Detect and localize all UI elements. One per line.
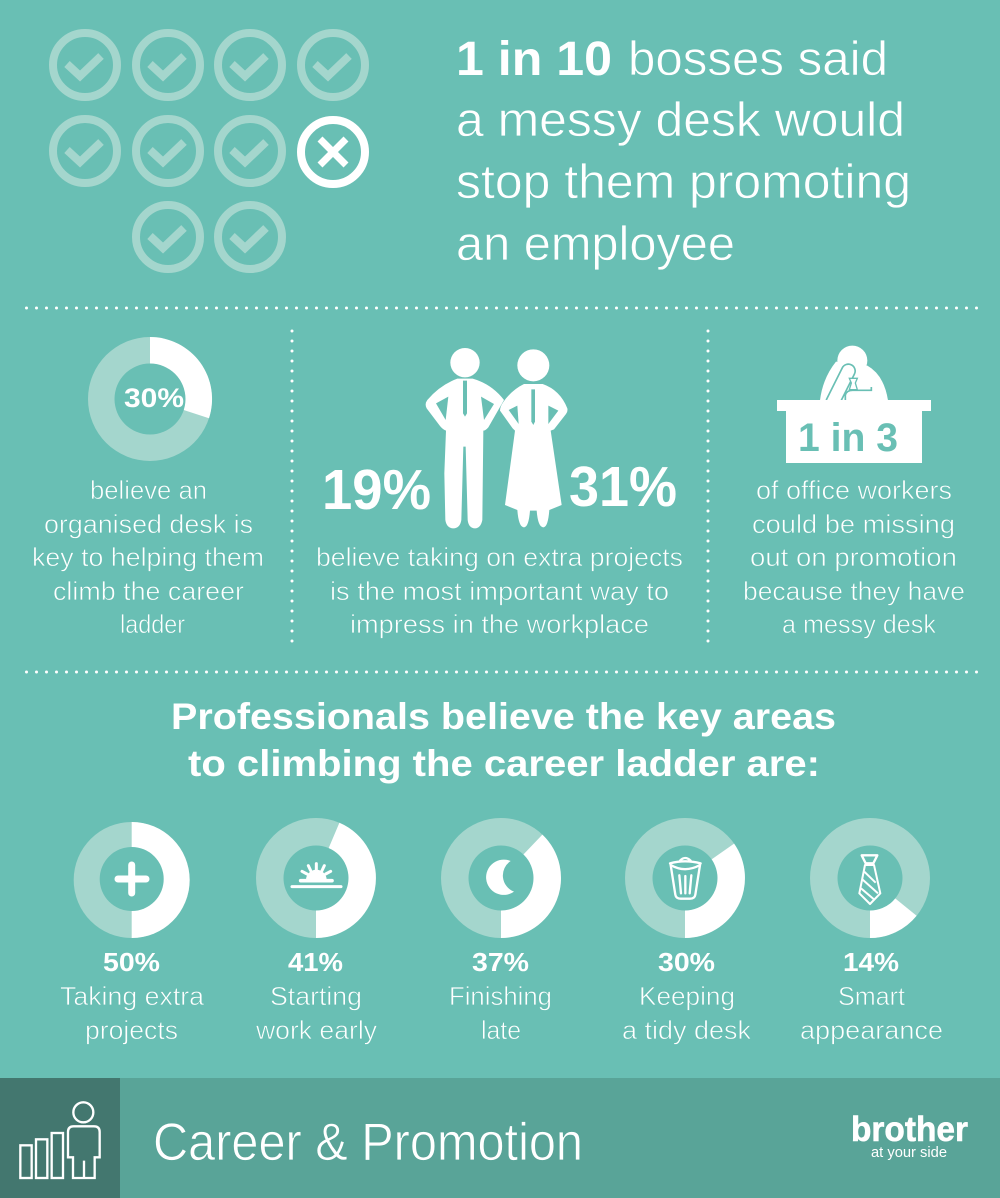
heading: key areas: Professionals believe the key areas — [171, 696, 836, 737]
text: organised desk: believe an — [90, 475, 207, 505]
label: 37% — [449, 949, 552, 1045]
headline: stop them promoting — [456, 156, 911, 209]
stat: 19%: 19% — [322, 458, 431, 522]
text: messy desk — [743, 475, 965, 639]
text: messy desk: because they have — [743, 576, 965, 606]
label: 41%: work early — [255, 1015, 377, 1045]
donut chart: 30%: 30% — [124, 383, 184, 413]
icon: sunrise — [292, 864, 341, 887]
headline: an employee — [456, 218, 735, 271]
panel: 41% starting work early — [255, 818, 377, 1045]
text: extra projects: is the most important way to — [330, 576, 669, 606]
icon: plus — [118, 865, 146, 893]
icon: desk — [777, 400, 931, 463]
footer title: Career & Promotion — [153, 1113, 583, 1172]
panel: 14% smart appearance — [800, 818, 943, 1045]
man figure — [426, 348, 504, 528]
panel: 1 in 10 bosses — [53, 33, 911, 271]
text: messy desk: of office workers — [756, 475, 952, 505]
text: extra projects: believe taking on extra projects — [316, 542, 683, 572]
label: 41%: 41% — [288, 949, 343, 977]
icon grid: nine ticks and one cross — [53, 33, 365, 269]
label: 50%: Taking extra — [60, 981, 205, 1011]
label: 41% — [255, 949, 377, 1045]
label: 14%: 14% — [843, 949, 899, 977]
icon tile: career growth — [0, 1078, 120, 1198]
label: 30%: 30% — [658, 949, 715, 977]
stat: 31%: 31% — [569, 455, 677, 519]
text: messy desk: out on promotion — [750, 542, 957, 572]
panel: 37% finishing late — [441, 818, 561, 1045]
donut chart: 50% — [74, 822, 190, 938]
label: 41%: Starting — [270, 981, 362, 1011]
text: extra projects — [316, 542, 683, 639]
icon: striped tie — [859, 855, 880, 904]
text: messy desk: a messy desk — [782, 609, 937, 639]
label: 50%: projects — [85, 1015, 178, 1045]
icon: waste bin — [670, 858, 701, 899]
label: 14%: Smart — [838, 981, 906, 1011]
donut chart: 30% — [625, 818, 745, 938]
headline — [456, 33, 911, 271]
label: 14% — [800, 949, 943, 1045]
label: 50% — [60, 949, 205, 1045]
logo: brother at your side: at your side — [871, 1144, 947, 1161]
label: 37%: 37% — [472, 949, 529, 977]
woman figure — [500, 349, 567, 527]
heading: key areas: to climbing the career ladder are: — [188, 743, 820, 784]
panel: 50% taking extra projects — [60, 822, 205, 1045]
label: 37%: Finishing — [449, 981, 552, 1011]
panel: organised desk 30% — [32, 337, 264, 639]
text: organised desk: ladder — [120, 609, 185, 639]
label: 30%: a tidy desk — [622, 1015, 752, 1045]
icon: person slumped over desk — [820, 346, 888, 408]
text: organised desk: organised desk is — [44, 509, 253, 539]
label: 37%: late — [481, 1015, 521, 1045]
donut chart: 14% — [810, 818, 930, 938]
headline: bosses said — [628, 33, 888, 86]
panel: extra projects 19% and 31% — [316, 348, 683, 639]
stat: 1 in 3: 1 in 3 — [798, 416, 898, 460]
headline: a messy desk would — [456, 94, 905, 147]
text: organised desk: key to helping them — [32, 542, 264, 572]
donut chart: 30% — [88, 337, 212, 461]
icon: man and woman — [426, 348, 567, 528]
logo: brother at your side: brother — [851, 1110, 968, 1149]
headline: 1 in 10 — [456, 33, 612, 86]
label: 14%: appearance — [800, 1015, 943, 1045]
text: organised desk: climb the career — [53, 576, 244, 606]
panel: 1 in 3 office workers — [743, 346, 965, 639]
donut chart: 41% — [256, 818, 376, 938]
icon: moon — [486, 860, 514, 895]
text: organised desk — [32, 475, 264, 639]
label: 30% — [622, 949, 752, 1045]
label: 50%: 50% — [103, 949, 160, 977]
donut chart: 37% — [441, 818, 561, 938]
text: messy desk: could be missing — [752, 509, 955, 539]
panel: 30% keeping a tidy desk — [622, 818, 752, 1045]
footer band — [0, 1078, 1000, 1198]
heading: key areas — [171, 696, 836, 784]
text: extra projects: impress in the workplace — [350, 609, 649, 639]
label: 30%: Keeping — [639, 981, 735, 1011]
